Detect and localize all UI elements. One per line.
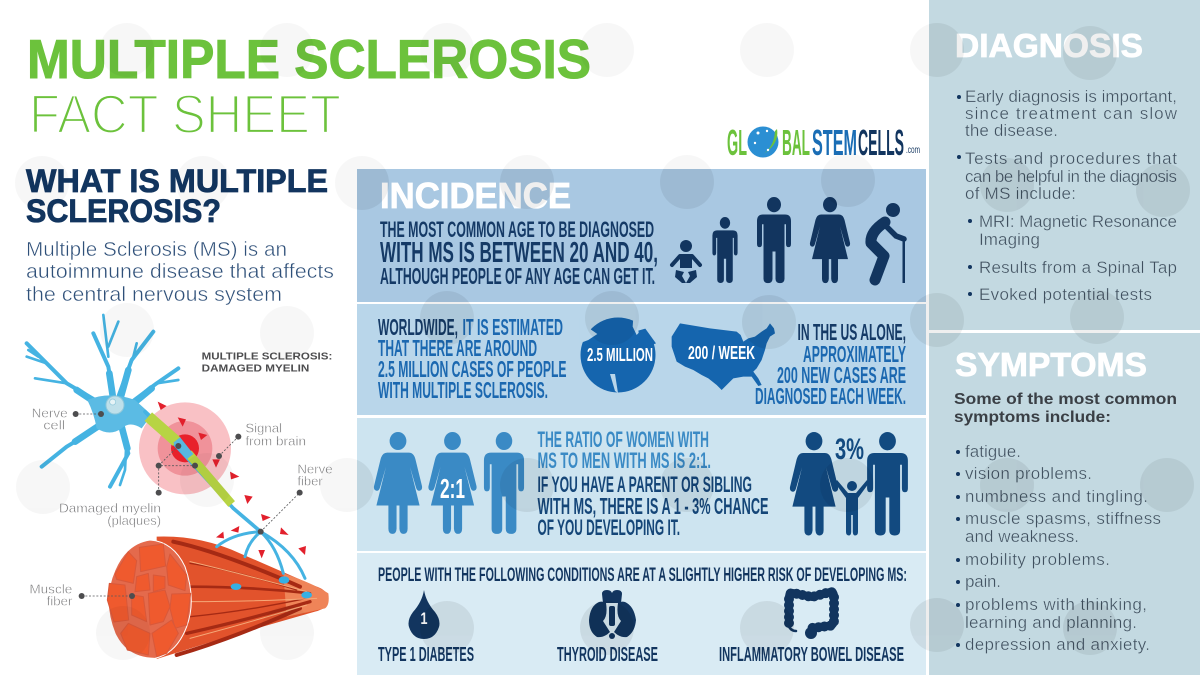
label: signal from brain: from brain bbox=[245, 433, 306, 448]
text: ratio of women to men: THE RATIO OF WOMEN WITH bbox=[538, 427, 709, 452]
icon: people of all ages bbox=[672, 197, 905, 283]
illustration: muscle cross-section bbox=[107, 540, 191, 658]
text: US cases: DIAGNOSED EACH WEEK. bbox=[755, 383, 906, 409]
logo: globalstemcells.com: GL bbox=[727, 122, 747, 163]
list: symptoms bbox=[956, 442, 1161, 654]
label: signal from brain: Signal bbox=[245, 421, 282, 436]
list: symptoms: numbness and tingling. bbox=[965, 487, 1148, 506]
icon: 2:1 women to men: 2:1 bbox=[440, 473, 465, 504]
icon: blood drop bbox=[408, 590, 440, 639]
panel: symptoms bbox=[929, 333, 1200, 675]
heading: what is multiple sclerosis: SCLEROSIS? bbox=[26, 193, 221, 229]
title: MULTIPLE SCLEROSIS bbox=[27, 28, 591, 90]
text: US cases bbox=[755, 319, 906, 409]
text: family risk bbox=[538, 472, 768, 540]
icon: family with 3 percent bbox=[790, 432, 908, 536]
heading: symptoms: SYMPTOMS bbox=[955, 346, 1147, 383]
list: symptoms: pain. bbox=[965, 572, 1001, 591]
icon: family with 3 percent: 3% bbox=[835, 433, 864, 466]
text: ratio of women to men bbox=[538, 427, 711, 473]
panel: incidence bbox=[357, 169, 926, 302]
icon: USA map bbox=[672, 323, 775, 390]
callout dots bbox=[73, 411, 303, 599]
list: symptoms: muscle spasms, stiffness bbox=[965, 509, 1161, 528]
list: symptoms: problems with thinking, bbox=[965, 595, 1147, 614]
heading: what is multiple sclerosis: WHAT IS MULTIPLE bbox=[26, 163, 328, 199]
icon: thyroid bbox=[589, 590, 636, 639]
text: common diagnosis age: THE MOST COMMON AGE TO BE DIAGNOSED bbox=[380, 217, 654, 242]
list: symptoms: vision problems. bbox=[965, 464, 1092, 483]
panel: risk conditions bbox=[357, 553, 926, 675]
label: nerve fiber: fiber bbox=[297, 474, 323, 489]
label: nerve cell: cell bbox=[43, 417, 65, 432]
label: type 1 diabetes: TYPE 1 DIABETES bbox=[378, 644, 474, 666]
text: US cases: 200 NEW CASES ARE bbox=[777, 362, 906, 388]
text: common diagnosis age bbox=[380, 217, 658, 289]
illustration: nerve cell bbox=[27, 315, 305, 578]
markers: motor end plates bbox=[231, 576, 312, 598]
label: nerve fiber bbox=[297, 461, 333, 489]
text: ratio of women to men: MS TO MEN WITH MS IS 2:1. bbox=[538, 448, 711, 473]
icon: woman bbox=[810, 197, 850, 283]
list: diagnosis facts: the disease. bbox=[965, 121, 1058, 140]
text: family risk: IF YOU HAVE A PARENT OR SIBLING bbox=[538, 472, 752, 497]
text: common diagnosis age: WITH MS IS BETWEEN 20 AND 40, bbox=[380, 237, 658, 269]
text: symptoms intro: Some of the most common bbox=[954, 391, 1177, 408]
icon: globe bbox=[579, 317, 657, 393]
text: symptoms intro: symptoms include: bbox=[954, 409, 1111, 426]
label: thyroid disease: THYROID DISEASE bbox=[557, 644, 658, 666]
panel: ratio and family risk bbox=[357, 418, 926, 551]
text: symptoms intro bbox=[954, 391, 1177, 426]
label: muscle fiber: fiber bbox=[47, 594, 73, 609]
illustration: axon with myelin bbox=[145, 412, 305, 578]
heading: damaged myelin diagram: MULTIPLE SCLEROSIS: bbox=[202, 351, 332, 362]
heading: damaged myelin diagram: DAMAGED MYELIN bbox=[202, 364, 309, 375]
logo: globalstemcells.com: CELLS bbox=[858, 122, 904, 163]
title: FACT SHEET bbox=[29, 83, 341, 145]
text: definition of MS: the central nervous system bbox=[26, 284, 282, 306]
label: 2.5 million: 2.5 MILLION bbox=[587, 345, 653, 365]
heading: diagnosis: DIAGNOSIS bbox=[955, 27, 1143, 64]
list: diagnosis facts: can be helpful in the diagnosis bbox=[965, 167, 1177, 186]
label: damaged myelin plaques: Damaged myelin bbox=[59, 500, 161, 515]
label: nerve cell bbox=[32, 405, 68, 432]
list: diagnosis facts bbox=[957, 87, 1178, 304]
markers: red signal arrows bbox=[158, 402, 306, 558]
list: symptoms: and weakness. bbox=[965, 527, 1079, 546]
illustration: plaque target rings bbox=[139, 402, 231, 494]
list: symptoms: mobility problems. bbox=[965, 550, 1110, 569]
list: diagnosis facts: Early diagnosis is important, bbox=[965, 87, 1177, 106]
text: definition of MS: Multiple Sclerosis (MS) is an bbox=[26, 239, 287, 261]
panel: worldwide and US cases bbox=[357, 304, 926, 415]
callout lines bbox=[76, 414, 300, 596]
list: diagnosis facts: since treatment can slow bbox=[965, 104, 1178, 123]
text: worldwide estimate bbox=[378, 314, 566, 403]
icon: man bbox=[757, 197, 791, 283]
icon: colon bbox=[788, 592, 834, 639]
icon: child bbox=[712, 217, 738, 283]
label: damaged myelin plaques bbox=[59, 500, 161, 528]
logo: globalstemcells.com: BAL bbox=[782, 122, 810, 163]
text: US cases: APPROXIMATELY bbox=[803, 341, 906, 367]
list: diagnosis facts: Imaging bbox=[979, 230, 1040, 249]
diagram: damaged myelin bbox=[27, 315, 333, 659]
label: inflammatory bowel disease: INFLAMMATORY BOWEL DISEASE bbox=[719, 644, 904, 666]
label: damaged myelin plaques: (plaques) bbox=[107, 513, 161, 528]
heading: incidence: INCIDENCE bbox=[380, 175, 571, 216]
text: worldwide estimate: 2.5 MILLION CASES OF PEOPLE bbox=[378, 356, 566, 382]
label: muscle fiber bbox=[29, 581, 73, 609]
label: signal from brain bbox=[245, 421, 306, 448]
list: symptoms: learning and planning. bbox=[965, 613, 1137, 632]
text: common diagnosis age: ALTHOUGH PEOPLE OF ANY AGE CAN GET IT. bbox=[380, 263, 655, 289]
illustration: muscle bbox=[107, 537, 329, 659]
icon: 2:1 women to men bbox=[374, 432, 524, 534]
text: worldwide estimate: WITH MULTIPLE SCLEROSIS. bbox=[378, 377, 548, 403]
panel: diagnosis bbox=[929, 0, 1200, 330]
label: nerve fiber: Nerve bbox=[297, 461, 333, 476]
icon: blood drop: 1 bbox=[420, 609, 428, 628]
heading: damaged myelin diagram bbox=[202, 351, 332, 375]
logo: globalstemcells.com: STEM bbox=[812, 122, 857, 163]
text: definition of MS bbox=[26, 239, 334, 306]
list: diagnosis facts: Evoked potential tests bbox=[979, 285, 1152, 304]
title bbox=[27, 28, 591, 145]
label: 200 per week: 200 / WEEK bbox=[688, 343, 755, 363]
logo: globalstemcells.com: .com bbox=[906, 145, 920, 156]
logo: globalstemcells.com bbox=[727, 122, 920, 163]
text: US cases: IN THE US ALONE, bbox=[798, 319, 906, 345]
list: symptoms: depression and anxiety. bbox=[965, 635, 1150, 654]
text: definition of MS: autoimmune disease that affects bbox=[26, 261, 334, 283]
label: nerve cell: Nerve bbox=[32, 405, 68, 420]
list: diagnosis facts: Results from a Spinal Tap bbox=[979, 258, 1177, 277]
text: worldwide estimate: WORLDWIDE, bbox=[378, 314, 458, 340]
icon: baby bbox=[672, 240, 700, 283]
text: worldwide estimate: IT IS ESTIMATED bbox=[462, 314, 563, 340]
text: family risk: WITH MS, THERE IS A 1 - 3% CHANCE bbox=[538, 493, 768, 519]
list: diagnosis facts: MRI: Magnetic Resonance bbox=[979, 212, 1177, 231]
icon: elderly person with cane bbox=[871, 203, 905, 283]
text: worldwide estimate: THAT THERE ARE AROUND bbox=[378, 335, 537, 361]
list: diagnosis facts: Tests and procedures that bbox=[965, 149, 1177, 168]
list: symptoms: fatigue. bbox=[965, 442, 1021, 461]
list: diagnosis facts: of MS include: bbox=[965, 184, 1076, 203]
heading: what is multiple sclerosis bbox=[26, 163, 328, 229]
label: muscle fiber: Muscle bbox=[29, 581, 72, 596]
text: family risk: OF YOU DEVELOPING IT. bbox=[538, 515, 680, 540]
